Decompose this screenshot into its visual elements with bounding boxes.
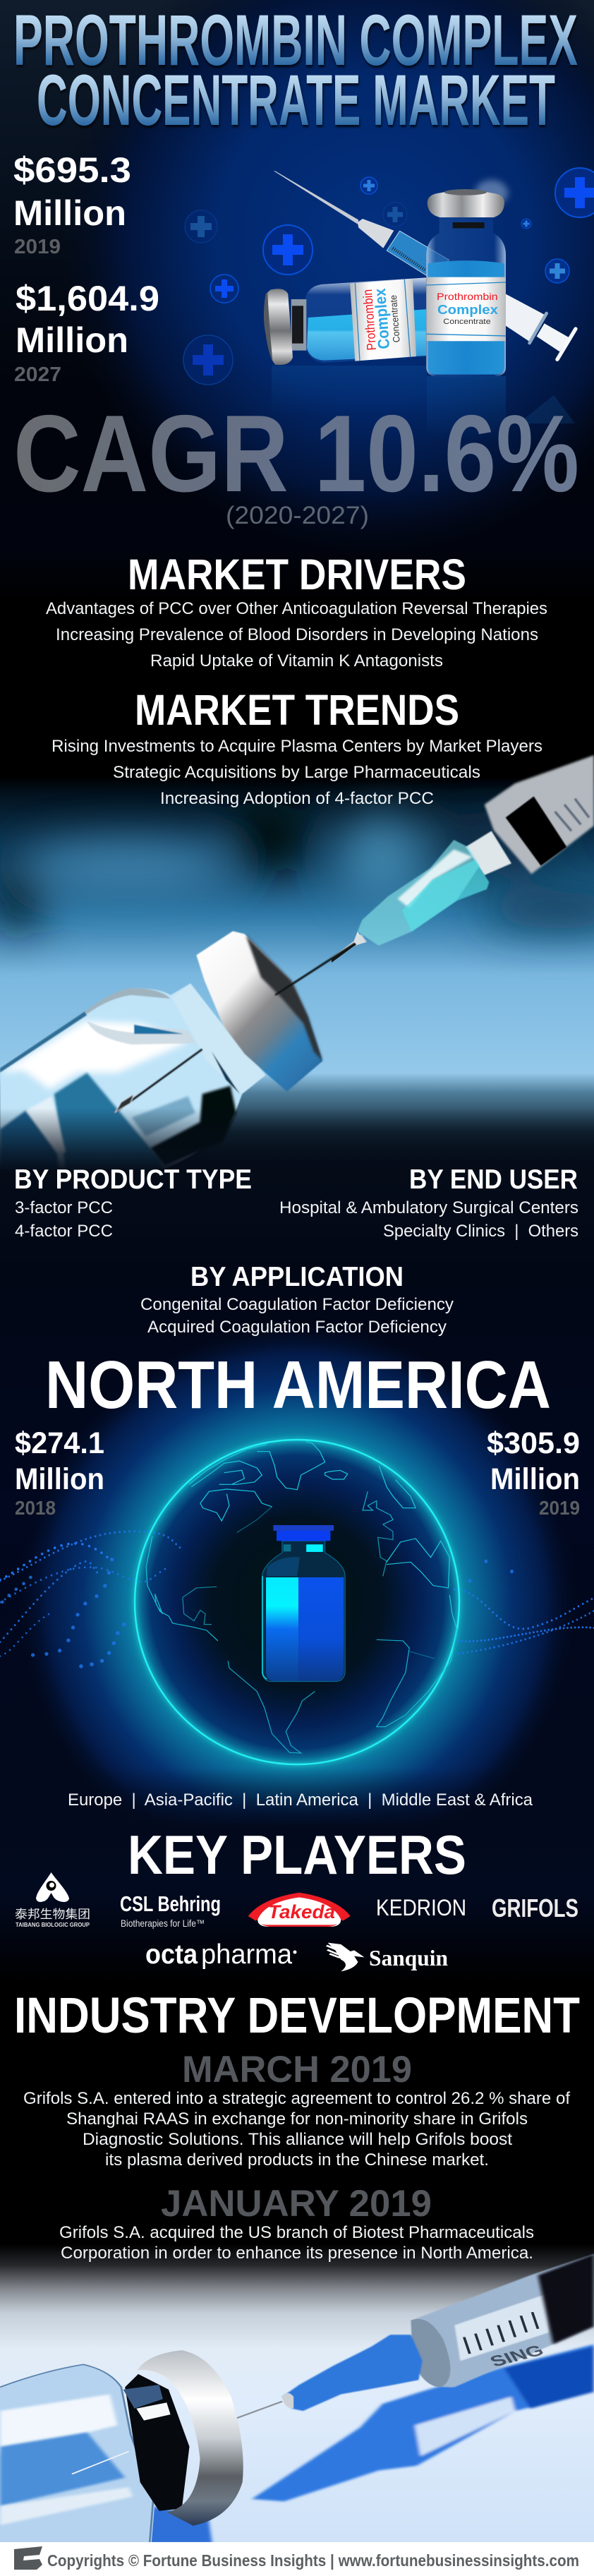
- reflection of vials: [272, 366, 575, 440]
- panel: by application: BY APPLICATION: [190, 1262, 404, 1292]
- market trends list: Strategic Acquisitions by Large Pharmaceuticals: [113, 763, 480, 782]
- stat: North America 2018: $274.1: [15, 1426, 104, 1460]
- stat: 2019 market value: $695.3: [13, 150, 131, 190]
- title: [13, 0, 578, 140]
- heading: market trends: MARKET TRENDS: [135, 686, 459, 734]
- development: March 2019: Diagnostic Solutions. This alliance will help Grifols boost: [83, 2130, 512, 2149]
- market drivers list: Advantages of PCC over Other Anticoagulation Reversal Therapies: [46, 599, 547, 618]
- vial: [0, 931, 367, 1169]
- key players and development background: [0, 1828, 594, 2258]
- stat: North America 2018: 2018: [15, 1497, 56, 1519]
- panel: by product type: [14, 1164, 252, 1241]
- market trends list: [51, 737, 543, 808]
- development: March 2019: Grifols S.A. entered into a strategic agreement to control 26.2 % share of: [23, 2089, 570, 2108]
- stat: North America 2019: Million: [490, 1462, 580, 1496]
- icon: medical plus badges: [183, 168, 594, 385]
- development: January 2019: [59, 2183, 534, 2263]
- stat: North America 2019: $305.9: [487, 1426, 580, 1460]
- market drivers list: Increasing Prevalence of Blood Disorders in Developing Nations: [56, 625, 538, 644]
- logo: Taibang Biologic Group: [15, 1872, 90, 1928]
- vial label: Prothrombin Complex Concentrate, rotated: Concentrate: [388, 295, 402, 343]
- logo: Octapharma: pharma: [201, 1939, 292, 1970]
- panel: by product type: 3-factor PCC: [15, 1198, 113, 1217]
- footer: [0, 2542, 594, 2576]
- stat: 2027 market value: 2027: [14, 363, 61, 386]
- globe: [135, 1440, 459, 1764]
- stat: North America 2018: Million: [15, 1462, 104, 1496]
- photo: needle and vial: SING: [487, 2342, 547, 2370]
- icon: lying vial: [264, 277, 426, 365]
- development: March 2019: MARCH 2019: [182, 2049, 412, 2090]
- development: January 2019: JANUARY 2019: [161, 2183, 432, 2225]
- heading: key players: KEY PLAYERS: [128, 1824, 466, 1886]
- syringe barrel: [411, 2253, 594, 2388]
- drivers and trends background: [0, 550, 594, 783]
- development: January 2019: Corporation in order to enhance its presence in North America.: [61, 2244, 533, 2263]
- vial label: Prothrombin Complex Concentrate, rotated: [360, 287, 402, 351]
- logo: Kedrion: KEDRION: [376, 1895, 466, 1920]
- stat: 2019 market value: 2019: [14, 236, 61, 258]
- stat: 2019 market value: Million: [13, 193, 126, 233]
- market trends list: Increasing Adoption of 4-factor PCC: [160, 789, 434, 808]
- blue needle hub: [282, 2335, 423, 2411]
- vial label: Prothrombin Complex Concentrate, rotated: Complex: [370, 287, 393, 349]
- continent outlines: [146, 1442, 457, 1753]
- logo: Sanquin: Sanquin: [369, 1945, 448, 1970]
- panel: by end user: Hospital & Ambulatory Surgical Centers: [279, 1198, 578, 1217]
- photo: needle and vial: [0, 2244, 594, 2544]
- particle waves: [0, 1531, 594, 1666]
- panel: by application: [140, 1262, 454, 1337]
- development: March 2019: [23, 2049, 570, 2169]
- logo: CSL Behring: CSL Behring: [120, 1891, 221, 1916]
- panel: by end user: BY END USER: [409, 1164, 578, 1195]
- blue shadow on surface: [147, 2345, 594, 2544]
- icon: glowing vial: [262, 1525, 345, 1682]
- cap ring: [125, 2374, 189, 2511]
- market drivers list: [46, 599, 547, 670]
- stat: North America 2019: [487, 1426, 580, 1519]
- logo: Sanquin: [327, 1943, 448, 1971]
- logo: CSL Behring: [120, 1891, 221, 1929]
- icon: Fortune Business Insights mark: [14, 2546, 42, 2570]
- stat: 2019 market value: [13, 150, 131, 258]
- vial label text: Concentrate: [443, 318, 491, 326]
- development: March 2019: its plasma derived products in the Chinese market.: [105, 2150, 489, 2169]
- vial label: Prothrombin Complex Concentrate, rotated: Prothrombin: [360, 289, 379, 351]
- logo: Takeda: Takeda: [268, 1901, 335, 1922]
- stat: North America 2018: [15, 1426, 104, 1519]
- glass vial: [0, 2364, 155, 2544]
- stat: North America 2019: 2019: [539, 1497, 580, 1519]
- panel: by product type: 4-factor PCC: [15, 1222, 113, 1241]
- market drivers list: Rapid Uptake of Vitamin K Antagonists: [150, 651, 443, 670]
- vial label text: Prothrombin: [437, 291, 498, 302]
- stat: 2027 market value: $1,604.9: [16, 279, 159, 318]
- vial label text: [437, 291, 499, 326]
- logo: Taibang Biologic Group: 泰邦生物集团: [15, 1908, 90, 1921]
- photo: syringe entering vial: [0, 755, 594, 1172]
- segmentation and region background: [0, 1172, 594, 1828]
- logo: Taibang Biologic Group: TAIBANG BIOLOGIC GROUP: [16, 1922, 90, 1928]
- logo: Octapharma: octa: [145, 1939, 198, 1970]
- vial label text: Complex: [437, 302, 499, 317]
- icon: upright vial: [426, 180, 508, 376]
- icon: syringe: [274, 171, 576, 359]
- panel: by application: Acquired Coagulation Factor Deficiency: [147, 1318, 447, 1337]
- top panel background: [0, 0, 594, 550]
- logo: CSL Behring: Biotherapies for Life™: [121, 1918, 205, 1929]
- panel: by end user: Specialty Clinics | Others: [383, 1222, 578, 1241]
- other regions: Europe | Asia-Pacific | Latin America | Middle East & Africa: [68, 1790, 533, 1810]
- panel: by end user: [279, 1164, 578, 1241]
- development: January 2019: Grifols S.A. acquired the US branch of Biotest Pharmaceuticals: [59, 2223, 534, 2242]
- panel: by application: Congenital Coagulation Factor Deficiency: [140, 1295, 454, 1314]
- development: March 2019: Shanghai RAAS in exchange for non-minority share in Grifols: [66, 2109, 528, 2129]
- logo: Octapharma: [145, 1939, 296, 1970]
- stat: 2027 market value: Million: [16, 320, 128, 360]
- panel: by product type: BY PRODUCT TYPE: [14, 1164, 252, 1195]
- market trends list: Rising Investments to Acquire Plasma Centers by Market Players: [51, 737, 543, 756]
- stat: 2027 market value: [14, 279, 159, 386]
- heading: market drivers: MARKET DRIVERS: [128, 550, 466, 598]
- syringe: [332, 755, 594, 963]
- logo: Takeda: [248, 1893, 351, 1927]
- CAGR period: (2020-2027): [226, 502, 369, 529]
